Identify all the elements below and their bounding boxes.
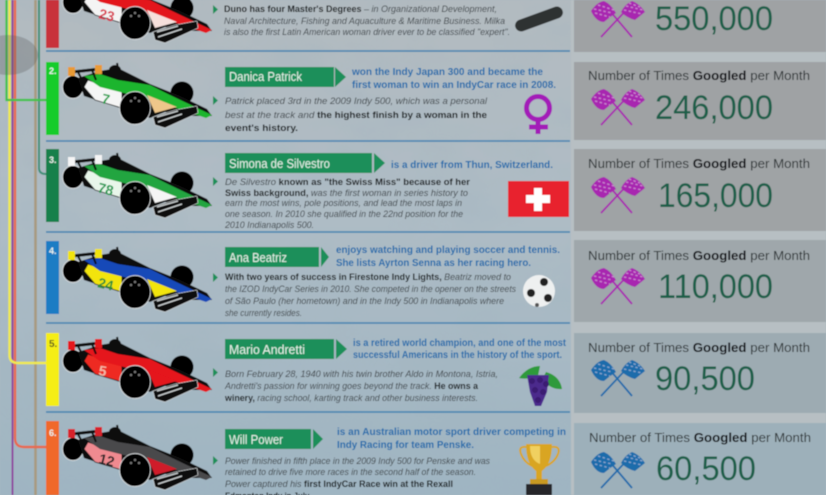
- icon: trophy: [520, 444, 559, 495]
- car 78: [62, 153, 212, 218]
- panel: driver 3 Simona de Silvestro: 2010 Indianapolis 500.: [224, 220, 314, 230]
- panel: googled stats 4: Number of Times Googled per Month: [588, 248, 810, 263]
- name tag: Ana Beatriz: [229, 251, 287, 265]
- name tag: Danica Patrick: [229, 70, 303, 84]
- panel: driver 6 Will Power: [46, 421, 566, 495]
- panel: googled stats 3: [574, 149, 826, 231]
- panel: driver 2 Danica Patrick: won the Indy Japan 300 and became the: [351, 67, 543, 78]
- car 12: [62, 425, 212, 490]
- panel: driver 3 Simona de Silvestro: De Silvestro known as "the Swiss Miss" because of her: [225, 177, 471, 187]
- icon: soccer ball: [523, 275, 555, 307]
- panel: driver 5 Mario Andretti: Andretti's passion for winning goes beyond the track. He owns a: [224, 381, 479, 391]
- icon: purple flags: [591, 268, 645, 304]
- panel: driver 2 Danica Patrick: best at the track and the highest finish by a woman in the: [225, 110, 487, 120]
- panel: driver 4 Ana Beatriz: [46, 241, 560, 318]
- icon: purple flags: [591, 177, 645, 213]
- icon: purple flags: [591, 89, 645, 125]
- name tag: Simona de Silvestro: [229, 157, 330, 171]
- panel: driver 3 Simona de Silvestro: one season. In 2010 she qualified in the 22nd position for the: [225, 209, 463, 219]
- car 24: 24: [96, 274, 115, 294]
- car 24: [62, 247, 212, 312]
- panel: driver 3 Simona de Silvestro: earn the most wins, pole positions, and lead the most laps in: [225, 198, 462, 208]
- panel: driver 4 Ana Beatriz: 4.: [49, 246, 57, 256]
- panel: googled stats 1: [574, 0, 826, 52]
- panel: driver 2 Danica Patrick: [46, 62, 556, 135]
- panel: googled stats 6: 60,500: [656, 450, 756, 488]
- panel: driver 4 Ana Beatriz: She lists Ayrton Senna as her racing hero.: [336, 258, 531, 269]
- panel: driver 1 Milka Duno: is also the first Latin American woman driver ever to be classified "expert".: [224, 27, 510, 37]
- panel: driver 1 Milka Duno: Duno has four Master's Degrees – in Organizational Development,: [224, 4, 497, 14]
- panel: driver 1 Milka Duno: [46, 0, 565, 48]
- panel: driver 3 Simona de Silvestro: [46, 149, 569, 230]
- car 5: [62, 337, 212, 402]
- panel: googled stats 5: Number of Times Googled per Month: [588, 340, 810, 355]
- panel: driver 6 Will Power: retained to drive five more races in the second half of the season.: [225, 467, 476, 477]
- car 12: 12: [97, 450, 116, 470]
- panel: driver 4 Ana Beatriz: the IZOD IndyCar Series in 2010. She competed in the opener on the streets: [225, 284, 516, 294]
- panel: googled stats 6: [574, 423, 826, 495]
- panel: driver 3 Simona de Silvestro: is a driver from Thun, Switzerland.: [391, 160, 553, 171]
- panel: driver 1 Milka Duno: Naval Architecture, Fishing and Aquaculture & Maritime Business. Milka: [224, 16, 505, 26]
- panel: googled stats 3: 165,000: [658, 177, 773, 215]
- icon: grapes: [519, 366, 562, 406]
- panel: track lines: [0, 0, 46, 495]
- panel: googled stats 5: [574, 333, 826, 413]
- name tag: [225, 247, 329, 267]
- car 5: 5: [97, 362, 108, 379]
- car 23: 23: [97, 5, 116, 25]
- panel: driver 4 Ana Beatriz: With two years of success in Firestone Indy Lights, Beatriz moved to: [225, 272, 511, 282]
- icon: blue flags: [591, 360, 645, 396]
- panel: driver 5 Mario Andretti: successful Americans in the history of the sport.: [353, 350, 562, 361]
- panel: driver 6 Will Power: Power finished in fifth place in the 2009 Indy 500 for Penske and was: [225, 456, 490, 466]
- car 7: [62, 63, 212, 128]
- name tag: [225, 429, 323, 449]
- car 23: [62, 0, 212, 43]
- row dividers: [46, 51, 570, 412]
- name tag: [225, 67, 346, 87]
- car 7: 7: [100, 90, 112, 108]
- panel: driver 5 Mario Andretti: winery, racing school, karting track and other business interests.: [224, 393, 478, 403]
- name tag: [225, 339, 347, 359]
- panel: googled stats 4: [574, 240, 826, 322]
- panel: driver 3 Simona de Silvestro: Swiss background, was the first woman in series history to: [225, 188, 468, 198]
- panel: driver 4 Ana Beatriz: she currently resides.: [225, 308, 302, 318]
- icon: venus symbol: [526, 96, 550, 134]
- panel: driver 5 Mario Andretti: 5.: [49, 339, 58, 350]
- panel: driver 5 Mario Andretti: is a retired world champion, and one of the most: [353, 338, 567, 349]
- panel: googled stats 2: Number of Times Googled per Month: [588, 68, 810, 83]
- panel: driver 5 Mario Andretti: [46, 333, 567, 406]
- panel: driver 3 Simona de Silvestro: 3.: [49, 155, 57, 165]
- panel: driver 4 Ana Beatriz: enjoys watching and playing soccer and tennis.: [336, 245, 560, 256]
- panel: googled stats 3: Number of Times Googled per Month: [588, 156, 810, 171]
- name tag: Will Power: [229, 433, 283, 447]
- panel: driver 6 Will Power: is an Australian motor sport driver competing in: [337, 427, 566, 438]
- icon: blue flags: [591, 452, 645, 488]
- panel: driver 2 Danica Patrick: 2.: [49, 66, 57, 76]
- panel: driver 5 Mario Andretti: Born February 28, 1940 with his twin brother Aldo in Montona, Istria,: [225, 369, 498, 379]
- panel: driver 4 Ana Beatriz: of São Paulo (her hometown) and in the Indy 500 in Indianapolis where: [225, 296, 504, 306]
- icon: purple flags: [591, 1, 645, 37]
- panel: driver 2 Danica Patrick: event's history.: [225, 123, 298, 133]
- panel: driver 2 Danica Patrick: Patrick placed 3rd in the 2009 Indy 500, which was a personal: [225, 96, 488, 106]
- panel: googled stats 2: [574, 62, 826, 140]
- panel: driver 6 Will Power: Power captured his first IndyCar Race win at the Rexall: [225, 479, 453, 489]
- panel: driver 6 Will Power: 6.: [49, 428, 57, 438]
- icon: Swiss flag: [508, 181, 569, 217]
- panel: googled stats 2: 246,000: [655, 89, 773, 127]
- panel: googled stats 5: 90,500: [655, 360, 755, 398]
- name tag: [225, 153, 385, 173]
- panel: driver 2 Danica Patrick: first woman to win an IndyCar race in 2008.: [352, 80, 556, 91]
- panel: driver 6 Will Power: Indy Racing for team Penske.: [337, 440, 474, 451]
- car 78: 78: [96, 179, 115, 199]
- panel: googled stats 1: 550,000: [655, 0, 773, 38]
- name tag: Mario Andretti: [229, 343, 305, 357]
- panel: googled stats 4: 110,000: [658, 268, 773, 306]
- panel: googled stats 6: Number of Times Googled per Month: [589, 430, 811, 445]
